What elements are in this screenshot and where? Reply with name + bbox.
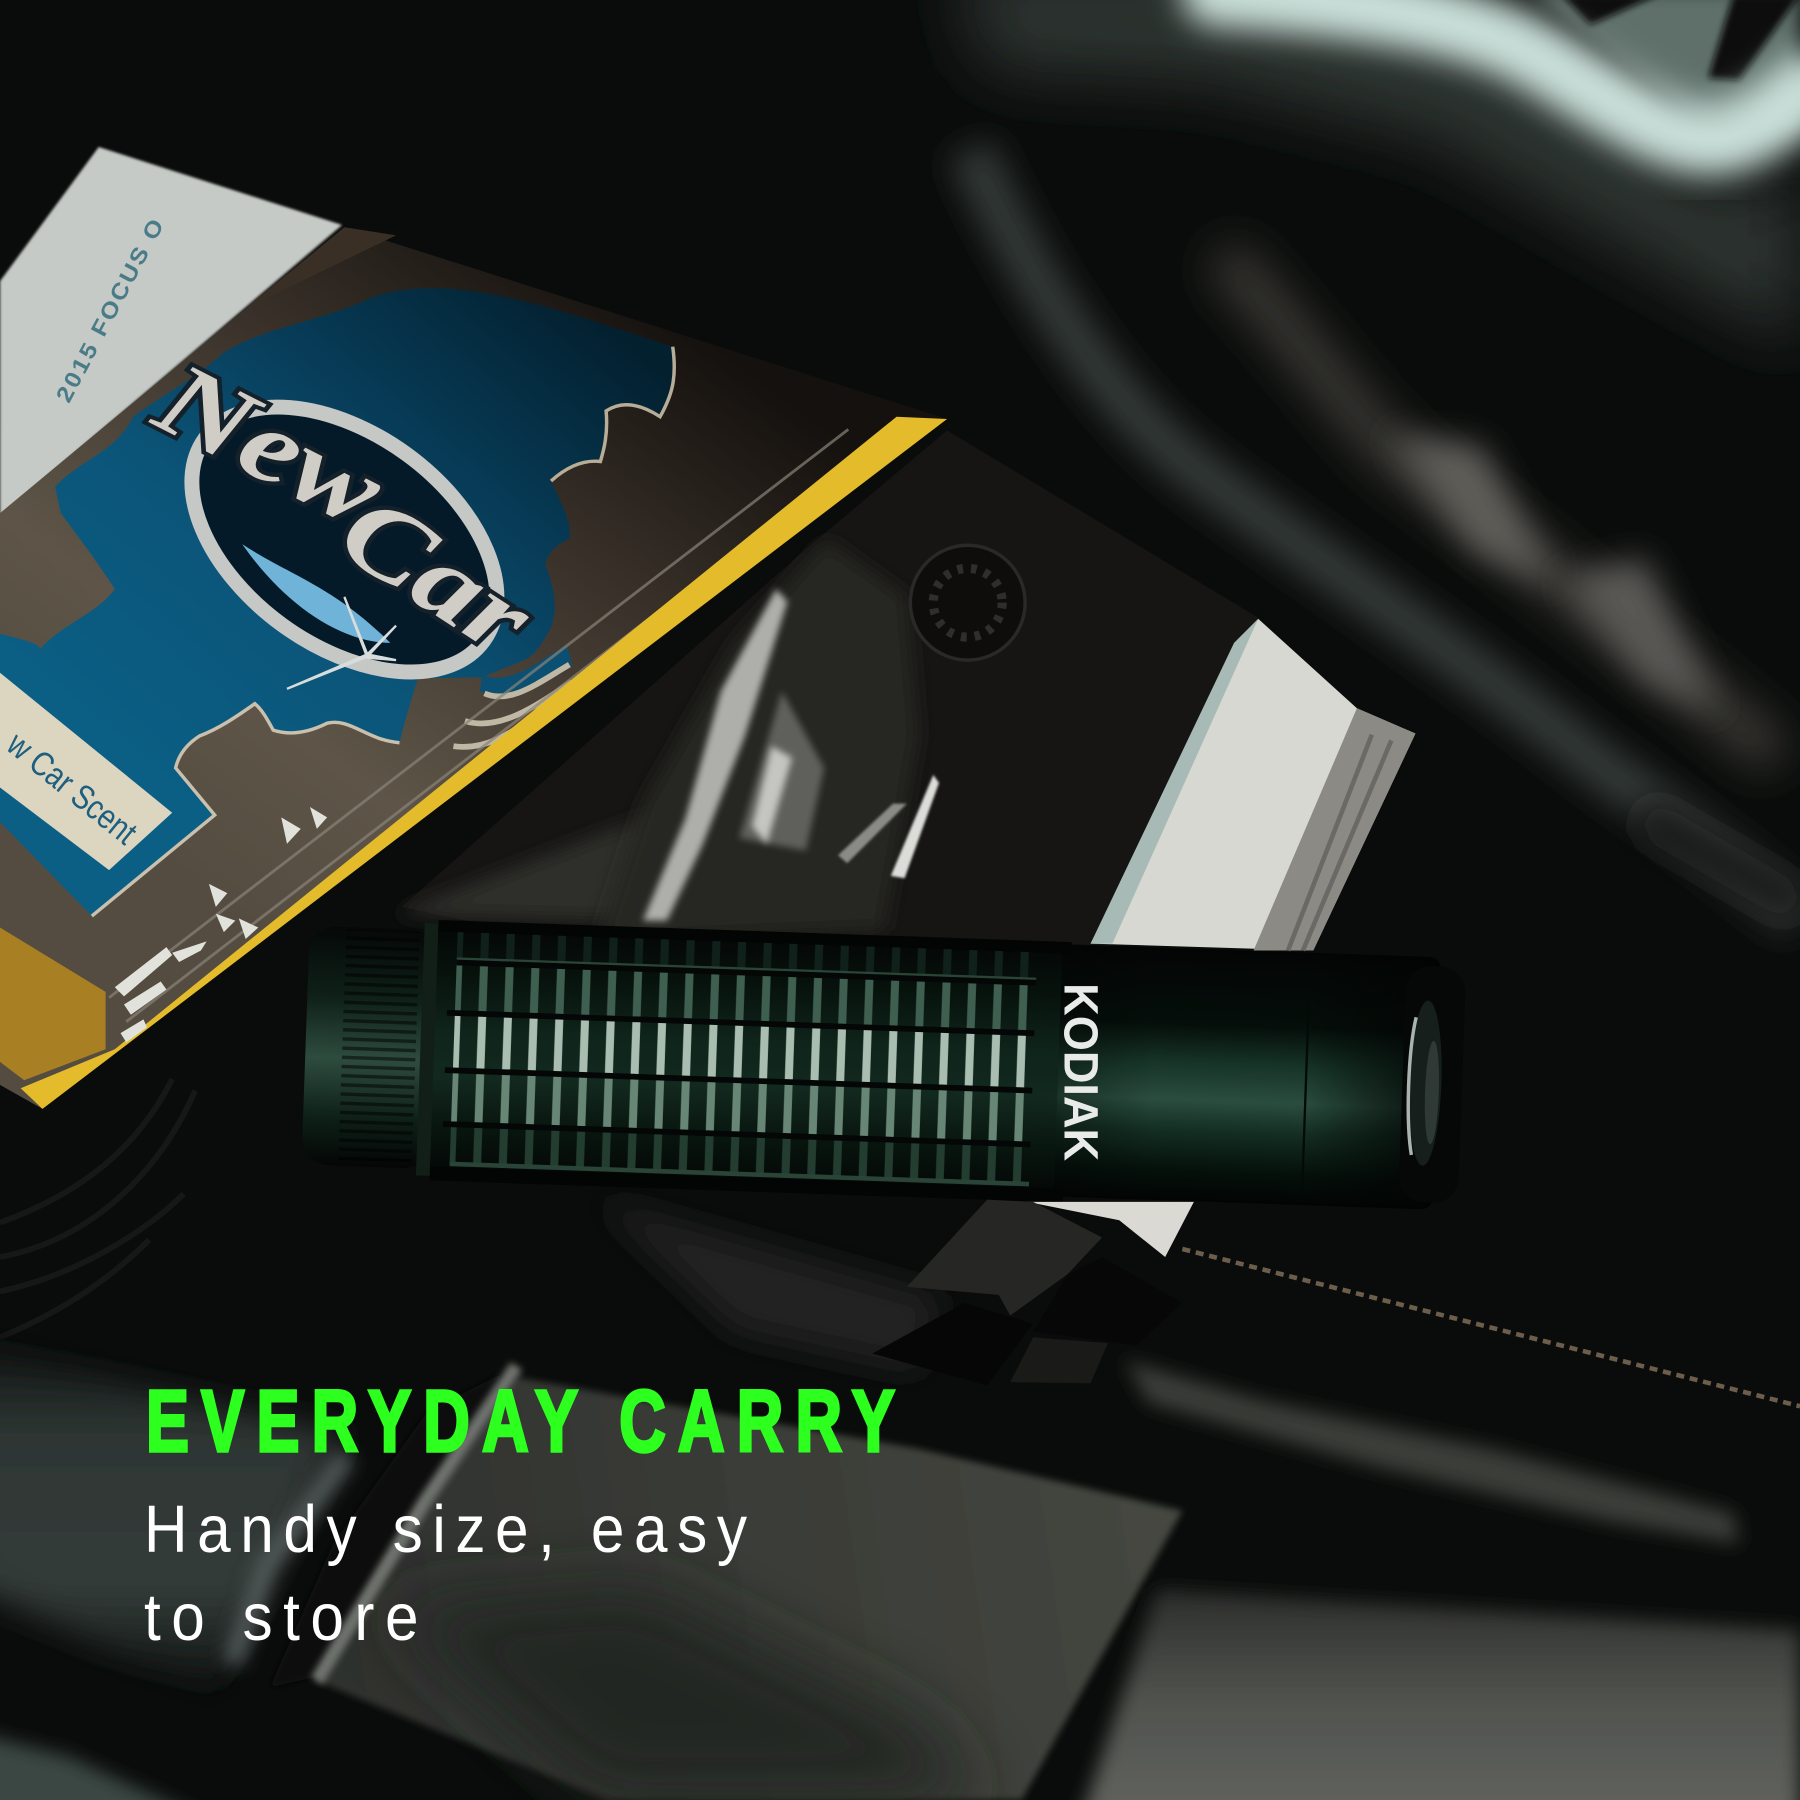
car wheel [910,545,1025,660]
bright steering wheel arc [1217,0,1800,140]
dashboard ridge peak one [1389,436,1559,585]
right mat [1079,1590,1800,1800]
Car wordmark: Car [320,470,553,678]
blurred floor mats [0,1343,1800,1800]
white card with 2015 Focus lettering [0,147,342,517]
dark ledge under flashlight [597,1200,1739,1544]
car brochure [394,430,1258,953]
car windshield streak [643,589,788,921]
sparkle [287,597,396,689]
black plastic clip [872,1200,1182,1386]
New wordmark: New [138,338,402,550]
dim grey arc band [970,149,1800,918]
packet left fold [0,928,106,1080]
outer dim band [1642,815,1800,907]
dark vents [1561,0,1800,80]
KODIAK flashlight [301,915,1467,1216]
air freshener oval badge and logo [138,338,553,726]
left mat [0,1343,344,1688]
wave blue gaps [480,645,572,695]
plastic seal lines [109,429,878,1022]
heading: Everyday Carry: EVERYDAY CARRY [146,1374,895,1470]
flashlight front bezel [1398,965,1466,1204]
upper right grey panel [1527,0,1800,126]
flashlight ribbed grip [430,920,1072,1203]
lanyard cords [0,1079,195,1337]
brown grey ridge [1221,255,1777,758]
bottom left lighter band [0,1733,218,1800]
flashlight head [1054,944,1441,1210]
light stripe B [317,1366,517,1681]
white card with 2015 Focus lettering: 2015 FOCUS O [51,213,170,407]
soft glow under bright arc [953,0,1800,344]
tree upper edge cream outline [551,347,674,481]
blurred dashboard and steering wheel [953,0,1800,918]
central mat [316,1378,1182,1800]
carpet seam line [1182,1249,1800,1406]
dashboard ridge peak two [1561,557,1720,712]
yellow packet edge [21,417,947,1109]
white paper under flashlight [1027,1202,1194,1257]
plastic wrapper highlights [115,807,327,1042]
flashlight tail knurled ring [301,919,441,1176]
stacked wave layers [453,665,572,747]
blue tree air freshener [0,288,674,916]
cream outline lower [92,704,399,916]
diagonal shadow on mat [379,1584,987,1800]
New Car Scent label: w Car Scent [0,725,144,852]
KODIAK logo: KODIAK [1054,983,1108,1161]
subheading line two: to store [144,1579,419,1655]
flashlight lens [1406,1000,1444,1166]
subheading line one: Handy size, easy [144,1491,747,1567]
car light sliver [891,775,939,878]
dark band between stripes [270,1372,505,1688]
faint stripe A [232,1456,347,1663]
car grille [739,691,824,851]
white booklet [1091,619,1415,951]
air freshener packet [0,227,947,1109]
